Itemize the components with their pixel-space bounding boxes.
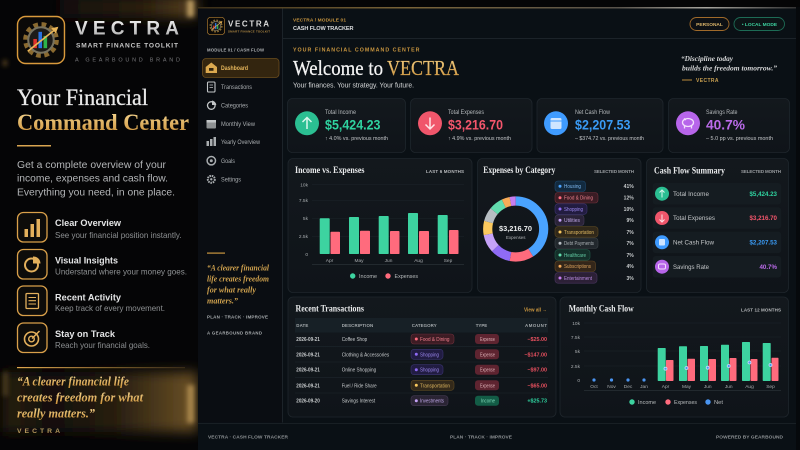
row 1: 2026-09-21 [296, 337, 320, 343]
row: total expenses: Total Expenses [673, 215, 715, 222]
feature: visual insights: Understand where your money goes. [55, 268, 187, 277]
panel: monthly cash flow: Monthly Cash Flow [569, 304, 634, 314]
panel: monthly cash flow [560, 297, 788, 417]
kpi: total income: $5,424.23 [325, 117, 381, 132]
kpi: total expenses: $3,216.70 [448, 117, 503, 132]
left quote: really matters.” [17, 406, 96, 420]
nav: transactions: Transactions [221, 85, 252, 91]
panel: expenses by category: Expenses by Category [483, 166, 555, 176]
feature: visual insights: Visual Insights [55, 256, 118, 266]
badge: local mode: • LOCAL MODE [742, 22, 778, 28]
table header: CATEGORY [412, 323, 437, 328]
feature: stay on track: Stay on Track [55, 329, 116, 340]
intro text: Get a complete overview of your [17, 160, 167, 171]
row 2 [296, 349, 547, 359]
panel: recent transactions [288, 297, 556, 417]
welcome header: YOUR FINANCIAL COMMAND CENTER [293, 48, 420, 54]
row 1: Coffee Shop [342, 337, 367, 343]
nav: transactions [208, 82, 252, 92]
row 3: Expense [480, 368, 495, 374]
kpi: total income: Total Income [325, 110, 357, 116]
category legend: 4% [626, 264, 634, 270]
kpi: savings rate [668, 98, 790, 152]
kpi: net cash flow [537, 98, 663, 152]
category legend: Food & Dining [564, 196, 593, 202]
feature: recent activity: Keep track of every movement. [55, 304, 165, 313]
legend: Income [638, 400, 656, 406]
welcome header: Welcome to [293, 56, 383, 80]
kpi: total expenses [410, 98, 532, 152]
row: total income: Total Income [673, 191, 710, 198]
row 5: Savings Interest [342, 399, 376, 405]
row 3 [296, 365, 547, 375]
donut center label: $3,216.70 [499, 224, 532, 233]
nav: monthly view: Monthly View [221, 122, 256, 128]
feature: clear overview: See your financial position instantly. [55, 231, 182, 240]
bar chart: income vs expenses: Sep [444, 258, 453, 264]
dashboard screen [198, 7, 800, 450]
panel: cash flow summary [646, 158, 788, 292]
panel: cash flow summary: Cash Flow Summary [654, 166, 725, 176]
category legend: 41% [624, 184, 634, 190]
row: savings rate: Savings Rate [673, 264, 710, 271]
sidebar brand [228, 20, 270, 33]
nav: categories: Categories [221, 103, 248, 109]
bar chart: monthly cash flow: 0 [577, 378, 580, 384]
bar chart: monthly cash flow: Dec [624, 384, 633, 390]
category legend: Entertainment [564, 276, 593, 282]
panel: income vs expenses: Income vs. Expenses [295, 166, 365, 176]
intro text: Everything you need, in one place. [17, 188, 175, 198]
category legend: 7% [626, 253, 634, 259]
panel: expenses by category [478, 158, 641, 292]
welcome header: Your finances. Your strategy. Your future. [293, 81, 414, 90]
kpi: net cash flow: $2,207.53 [575, 117, 631, 132]
row 1: Food & Dining [420, 337, 450, 343]
donut chart [488, 201, 544, 257]
row 4: Fuel / Ride Share [342, 383, 377, 389]
bar chart: monthly cash flow: 7.5k [571, 335, 581, 341]
category legend [555, 181, 634, 283]
sidebar quote: “A clearer financial [207, 263, 270, 273]
panel: cash flow summary: SELECTED MONTH [741, 169, 781, 174]
row: total expenses: $3,216.70 [749, 215, 778, 222]
row 4: 2026-09-21 [296, 383, 320, 389]
row: savings rate: 40.7% [759, 264, 777, 271]
kpi: total income: ↑ 4.0% vs. previous month [325, 136, 388, 142]
table header: AMOUNT [525, 323, 547, 328]
feature: clear overview [18, 212, 182, 242]
badge: personal [690, 18, 729, 30]
welcome header [293, 48, 459, 90]
category legend: Shopping [564, 207, 583, 213]
nav: dashboard active: Dashboard [221, 66, 248, 72]
category legend: Subscriptions [564, 264, 591, 270]
feature: visual insights [18, 250, 187, 279]
legend: Expenses [674, 400, 697, 406]
badge: personal: PERSONAL [696, 22, 723, 28]
category legend: Healthcare [564, 253, 586, 259]
icon: wallet [544, 111, 568, 135]
kpi: savings rate: – 5.0 pp vs. previous month [706, 136, 773, 142]
sidebar brand line: A GEARBOUND BRAND [207, 330, 262, 335]
bar chart: monthly cash flow: Oct [590, 384, 598, 390]
left quote: “A clearer financial life [17, 374, 129, 388]
row 1: Expense [480, 337, 495, 343]
header quote: “Discipline today [681, 54, 734, 63]
feature: recent activity [18, 286, 165, 316]
footer: PLAN · TRACK · IMPROVE [450, 434, 513, 440]
row 2: Clothing & Accessories [342, 352, 390, 358]
feature: stay on track: Reach your financial goals. [55, 341, 150, 350]
kpi: total expenses: ↑ 4.9% vs. previous month [448, 136, 511, 142]
category legend: 10% [624, 207, 634, 213]
sidebar section label: MODULE 01 / CASH FLOW [207, 48, 265, 53]
bar chart: income vs expenses: 2.5k [299, 234, 309, 240]
nav: monthly view [206, 120, 256, 128]
icon: down arrow [418, 111, 442, 135]
row: net cash flow: Net Cash Flow [673, 239, 715, 246]
welcome header: VECTRA [387, 56, 459, 80]
row 2: −$147.00 [524, 352, 547, 358]
category legend: 12% [624, 196, 634, 202]
bar chart: monthly cash flow [571, 321, 781, 391]
bar chart: income vs expenses [299, 182, 464, 265]
panel: income vs expenses [288, 158, 472, 292]
bar chart: monthly cash flow: 5k [575, 349, 581, 355]
row 4: Transportation [420, 383, 450, 389]
category legend: Debt Payments [564, 241, 594, 247]
legend: Expenses [394, 274, 418, 280]
icon: pie chart [18, 250, 47, 279]
feature: recent activity: Recent Activity [55, 292, 122, 304]
badge: local mode [734, 18, 784, 30]
nav: yearly overview: Yearly Overview [221, 140, 261, 146]
sidebar brand: SMART FINANCE TOOLKIT [228, 29, 270, 33]
nav: settings [208, 176, 241, 183]
left quote: creates freedom for what [17, 390, 144, 404]
row 4: −$65.00 [527, 383, 547, 389]
row: net cash flow [653, 232, 781, 253]
row 1: −$25.00 [527, 337, 547, 343]
nav: categories [208, 100, 248, 109]
intro text: income, expenses and cash flow. [17, 174, 168, 184]
table header: DATE [296, 323, 308, 328]
bar chart: monthly cash flow: Nov [607, 384, 616, 390]
kpi: net cash flow: Net Cash Flow [575, 110, 611, 116]
table header: TYPE [476, 323, 487, 328]
icon: up arrow [295, 111, 319, 135]
legend: Income [359, 274, 377, 280]
row 5: +$25.73 [527, 399, 547, 405]
bar chart: monthly cash flow: Apr [662, 384, 670, 390]
brand name: VECTRA [75, 19, 179, 40]
icon: document [18, 286, 47, 316]
sidebar [198, 8, 283, 422]
donut center label: Expenses [506, 235, 526, 241]
sidebar quote: life creates freedom [207, 274, 269, 284]
icon: vectra gear logo [18, 17, 64, 63]
row: total income: $5,424.23 [749, 191, 778, 198]
bar chart: monthly cash flow: 2.5k [571, 364, 581, 370]
category legend: 9% [626, 218, 634, 224]
category legend: Utilities [564, 218, 580, 224]
row: savings rate [653, 256, 781, 278]
row 3: Online Shopping [342, 368, 376, 374]
bar chart: monthly cash flow: May [682, 384, 692, 390]
category legend: 7% [626, 241, 634, 247]
header quote: builds the freedom tomorrow.” [682, 64, 777, 73]
bar chart: monthly cash flow: 10k [572, 321, 581, 327]
main heading: Your Financial [17, 85, 148, 110]
bar chart: monthly cash flow: Aug [745, 384, 754, 390]
sidebar brand: VECTRA [228, 20, 269, 29]
main heading: Command Center [17, 110, 189, 135]
panel: recent transactions: Recent Transactions [296, 304, 364, 314]
row: net cash flow: $2,207.53 [749, 239, 778, 246]
row 3: 2026-09-21 [296, 368, 320, 374]
bar chart: monthly cash flow: Jun [704, 384, 712, 390]
kpi: total expenses: Total Expenses [448, 110, 484, 116]
nav: goals: Goals [221, 159, 235, 165]
row 2: Shopping [420, 352, 439, 358]
main heading [17, 85, 189, 135]
icon: bars [18, 212, 47, 242]
feature: clear overview: Clear Overview [55, 218, 122, 229]
row 3: −$97.00 [527, 368, 547, 374]
kpi: total income [288, 98, 406, 152]
legend: Net [714, 400, 723, 406]
header quote: VECTRA [696, 78, 719, 84]
category legend: Transportation [564, 230, 594, 236]
panel: income vs expenses: LAST 6 MONTHS [426, 169, 464, 174]
left quote [17, 374, 144, 435]
bar chart: income vs expenses: 7.5k [299, 198, 309, 204]
row 4 [296, 380, 547, 390]
bar chart: income vs expenses: Aug [414, 258, 423, 264]
top bar: CASH FLOW TRACKER [293, 26, 354, 32]
footer [198, 423, 796, 440]
nav: dashboard active [202, 58, 279, 78]
row 1 [296, 334, 547, 344]
sidebar quote [207, 263, 270, 306]
bar chart: monthly cash flow: Jun [725, 384, 733, 390]
brand tagline: SMART FINANCE TOOLKIT [76, 42, 178, 50]
icon: target [18, 323, 47, 352]
nav: settings: Settings [221, 177, 241, 183]
nav: goals [207, 156, 235, 165]
intro text [17, 160, 175, 198]
header quote [681, 54, 777, 84]
row 4: Expense [480, 383, 495, 389]
category legend: 7% [626, 230, 634, 236]
table header [295, 318, 548, 332]
top bar [283, 18, 796, 39]
icon: small vectra logo [207, 17, 225, 35]
kpi: net cash flow: – $374.72 vs. previous month [575, 136, 644, 142]
icon: piggy bank [676, 111, 700, 135]
category legend: Housing [564, 184, 581, 190]
bar chart: monthly cash flow: Jan [640, 384, 648, 390]
footer: VECTRA · CASH FLOW TRACKER [208, 434, 289, 440]
kpi: savings rate: 40.7% [706, 117, 745, 132]
panel: recent transactions: View all → [524, 308, 547, 314]
bar chart: income vs expenses: 10k [300, 182, 309, 188]
table header: DESCRIPTION [342, 323, 373, 328]
kpi: savings rate: Savings Rate [706, 110, 738, 116]
bar chart: income vs expenses: 0 [305, 252, 308, 258]
row: total income [653, 183, 781, 204]
row 5: Investments [420, 399, 444, 405]
row 2: Expense [480, 352, 495, 358]
legend [350, 273, 418, 280]
brand byline: A GEARBOUND BRAND [75, 58, 180, 64]
row: total expenses [653, 207, 781, 229]
row 2: 2026-09-21 [296, 352, 320, 358]
top bar: VECTRA / MODULE 01 [293, 18, 346, 24]
brand header [18, 17, 180, 63]
nav: yearly overview [206, 137, 261, 146]
bar chart: income vs expenses: Apr [326, 258, 334, 264]
donut center label [499, 224, 532, 241]
bar chart: monthly cash flow: Sep [766, 384, 775, 390]
panel: monthly cash flow: LAST 12 MONTHS [741, 308, 781, 312]
left panel background [0, 0, 197, 450]
footer: POWERED BY GEARBOUND [716, 434, 784, 440]
row 3: Shopping [420, 368, 439, 374]
row 5 [296, 396, 547, 406]
left quote: VECTRA [17, 428, 60, 435]
sidebar quote: matters.” [207, 296, 239, 306]
sidebar motto: PLAN · TRACK · IMPROVE [207, 314, 268, 319]
sidebar quote: for what really [207, 285, 256, 295]
bar chart: income vs expenses: 5k [303, 216, 309, 222]
bar chart: income vs expenses: Jun [385, 258, 393, 264]
row 5: Income [481, 399, 495, 405]
panel: expenses by category: SELECTED MONTH [594, 169, 634, 174]
category legend: 3% [626, 276, 634, 282]
feature: stay on track [18, 323, 150, 352]
row 5: 2026-09-20 [296, 399, 320, 405]
bar chart: income vs expenses: May [354, 258, 364, 264]
legend [629, 399, 723, 406]
